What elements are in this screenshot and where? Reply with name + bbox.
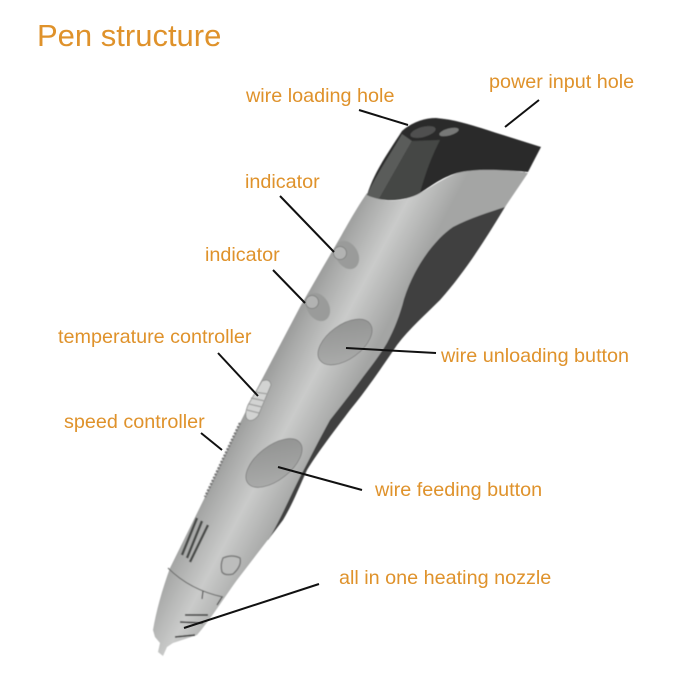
speed control strip [205,423,240,497]
pen grip: dark rear panel [262,172,525,540]
logo badge [221,556,240,575]
pen illustration [153,118,541,656]
leader: temperature controller [218,353,258,396]
pen cap: black top [367,118,541,200]
pen body: grey barrel with nozzle [153,169,528,656]
leader: speed controller [201,433,222,450]
wire unloading button [310,310,380,374]
wire feeding button [238,429,310,497]
nozzle seam and marks [168,568,223,637]
label: wire feeding button: wire feeding button [374,479,542,501]
label: temperature controller: temperature controller [58,326,252,348]
vent slots [182,518,208,562]
leader: power input hole [505,100,539,127]
leader: wire feeding button [278,467,362,490]
label: power input hole: power input hole [489,71,634,93]
temperature wheel [246,380,271,420]
leader: indicator lower [273,270,305,303]
label: speed controller: speed controller [64,411,205,433]
leader: wire unloading button [346,348,436,353]
label: wire loading hole: wire loading hole [245,85,394,107]
label: all in one heating nozzle: all in one heating nozzle [339,567,551,589]
title: Pen structure [37,18,221,53]
label: indicator upper: indicator [245,171,320,193]
label: indicator lower: indicator [205,244,280,266]
indicator lower [301,289,335,325]
leader: wire loading hole [359,110,408,125]
label: wire unloading button: wire unloading button [440,345,629,367]
indicator upper [330,237,364,273]
leader: indicator upper [280,196,334,252]
leader: nozzle [184,584,319,628]
